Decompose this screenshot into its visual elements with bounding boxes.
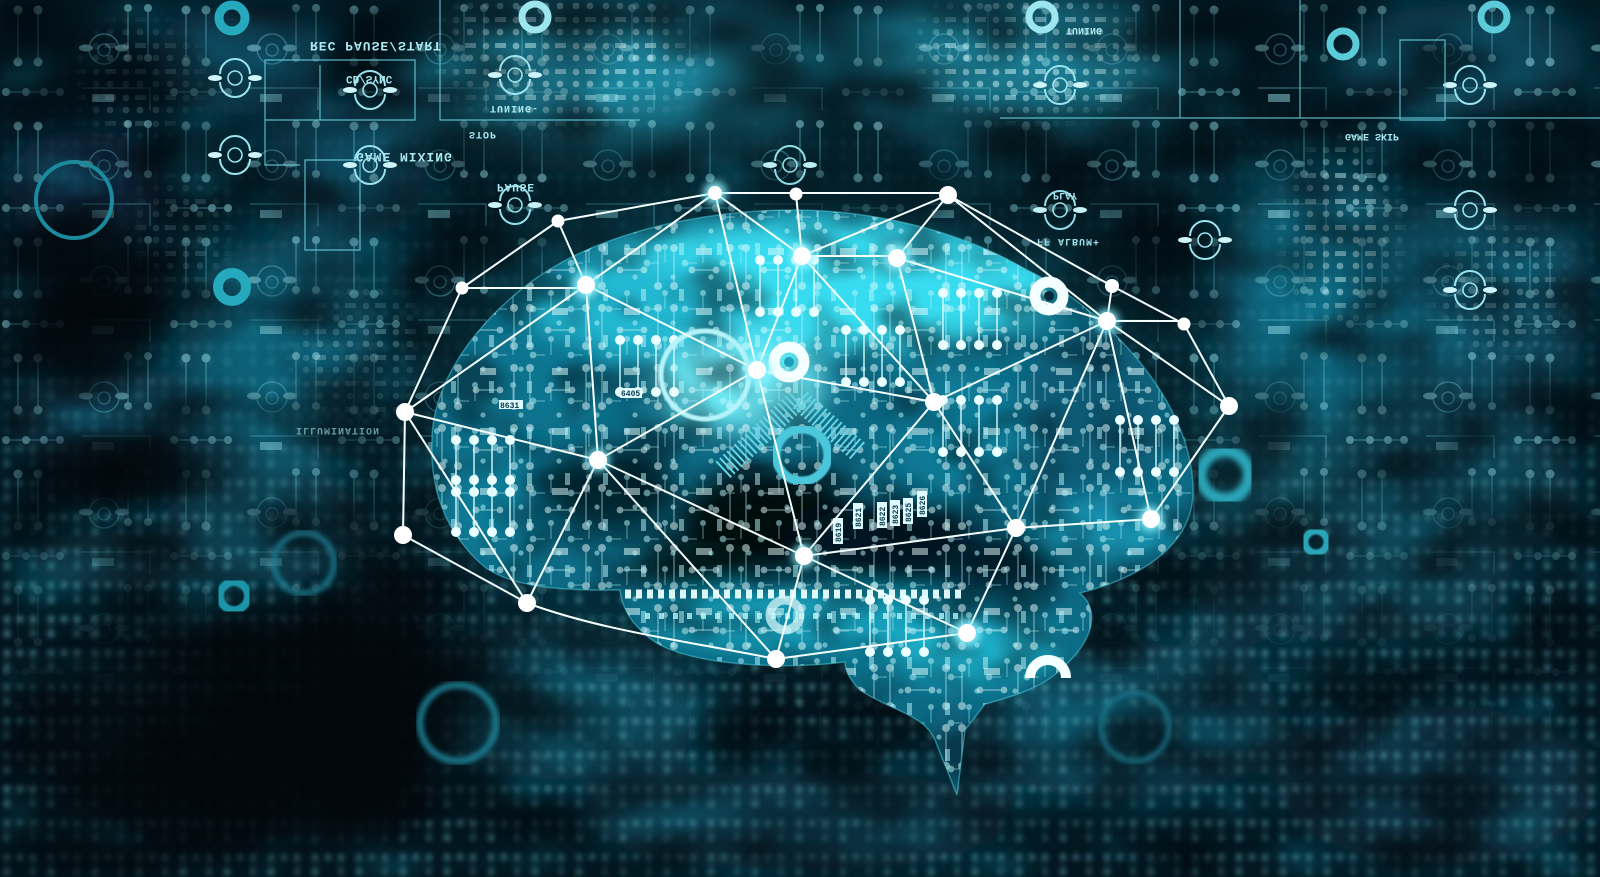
silkscreen labels (mirrored) (296, 24, 1399, 435)
trace boxes (265, 0, 1600, 250)
ring: lower centre faded (770, 600, 800, 630)
ring: top right (1481, 4, 1507, 30)
component value labels: 8619 (835, 523, 844, 542)
white ring: right (1035, 282, 1063, 310)
brain interior: dark mottling (420, 200, 1210, 800)
white ring: centre (774, 347, 804, 377)
pad groups (451, 255, 1179, 657)
ring: top right centre (1029, 4, 1055, 30)
silkscreen labels (mirrored): TUNING (1066, 24, 1102, 35)
knob group (208, 56, 1497, 309)
background: darker vignettes (0, 190, 580, 875)
ring: large thin left (36, 162, 112, 238)
component value labels: 8626 (919, 496, 928, 515)
component value labels (499, 388, 928, 544)
component value labels: 8625 (905, 503, 914, 522)
ring: lower left thin (274, 533, 334, 593)
white ring: lower right (1030, 660, 1066, 678)
ring: right small (1305, 531, 1327, 553)
ring: bottom left large (420, 685, 496, 761)
ring: left middle (218, 273, 246, 301)
chip centre circle (776, 429, 828, 481)
silkscreen labels (mirrored): PAUSE (497, 180, 535, 192)
ring: lower left (220, 582, 248, 610)
background: dense bright component clusters (78, 2, 1568, 425)
brain interior: circuit pattern (438, 210, 1182, 770)
component value labels: 8621 (855, 508, 864, 527)
silkscreen labels (mirrored): STOP (469, 128, 497, 139)
silkscreen labels (mirrored): GAME SKIP (1345, 130, 1399, 141)
silkscreen labels (mirrored): CD/SYNC (346, 72, 393, 84)
component value labels: 8631 (500, 402, 519, 411)
silkscreen labels (mirrored): REC PAUSE/START (310, 38, 442, 53)
ring: right upper (1330, 31, 1356, 57)
silkscreen labels (mirrored): GAME MIXING (356, 149, 453, 164)
ring: top left (219, 5, 245, 31)
brain interior: bright and dark lobes (445, 219, 1175, 800)
brain: silhouette and interior (420, 200, 1210, 800)
chip pins: diagonals (723, 400, 860, 470)
network: nodes (394, 186, 1238, 668)
network: node glows (572, 181, 1164, 647)
network: connecting lines (403, 193, 1229, 659)
brain: outline stroke (432, 210, 1193, 795)
background: defocused circuit components (1, 176, 1597, 877)
silkscreen labels (mirrored): TUNING- (490, 102, 539, 113)
ring: bottom right large (1101, 693, 1169, 761)
silkscreen labels (mirrored): PLAY (1053, 189, 1077, 200)
ring: right blurred (1201, 451, 1249, 499)
ring: top centre (522, 4, 548, 30)
silkscreen labels (mirrored): FF ALBUM+ (1037, 235, 1100, 246)
pad row (625, 590, 965, 598)
component value labels: 8623 (892, 505, 901, 524)
brain details: circuit components (451, 255, 1179, 678)
brain: halo (350, 120, 1250, 700)
brain interior: fine component pattern (434, 210, 1191, 772)
pad row lower (645, 613, 960, 619)
silkscreen labels (mirrored): ILLUMINATION (296, 424, 380, 435)
component value labels: 6405 (621, 390, 640, 399)
glowing circular area (661, 331, 749, 419)
component value labels: 8622 (879, 507, 888, 526)
